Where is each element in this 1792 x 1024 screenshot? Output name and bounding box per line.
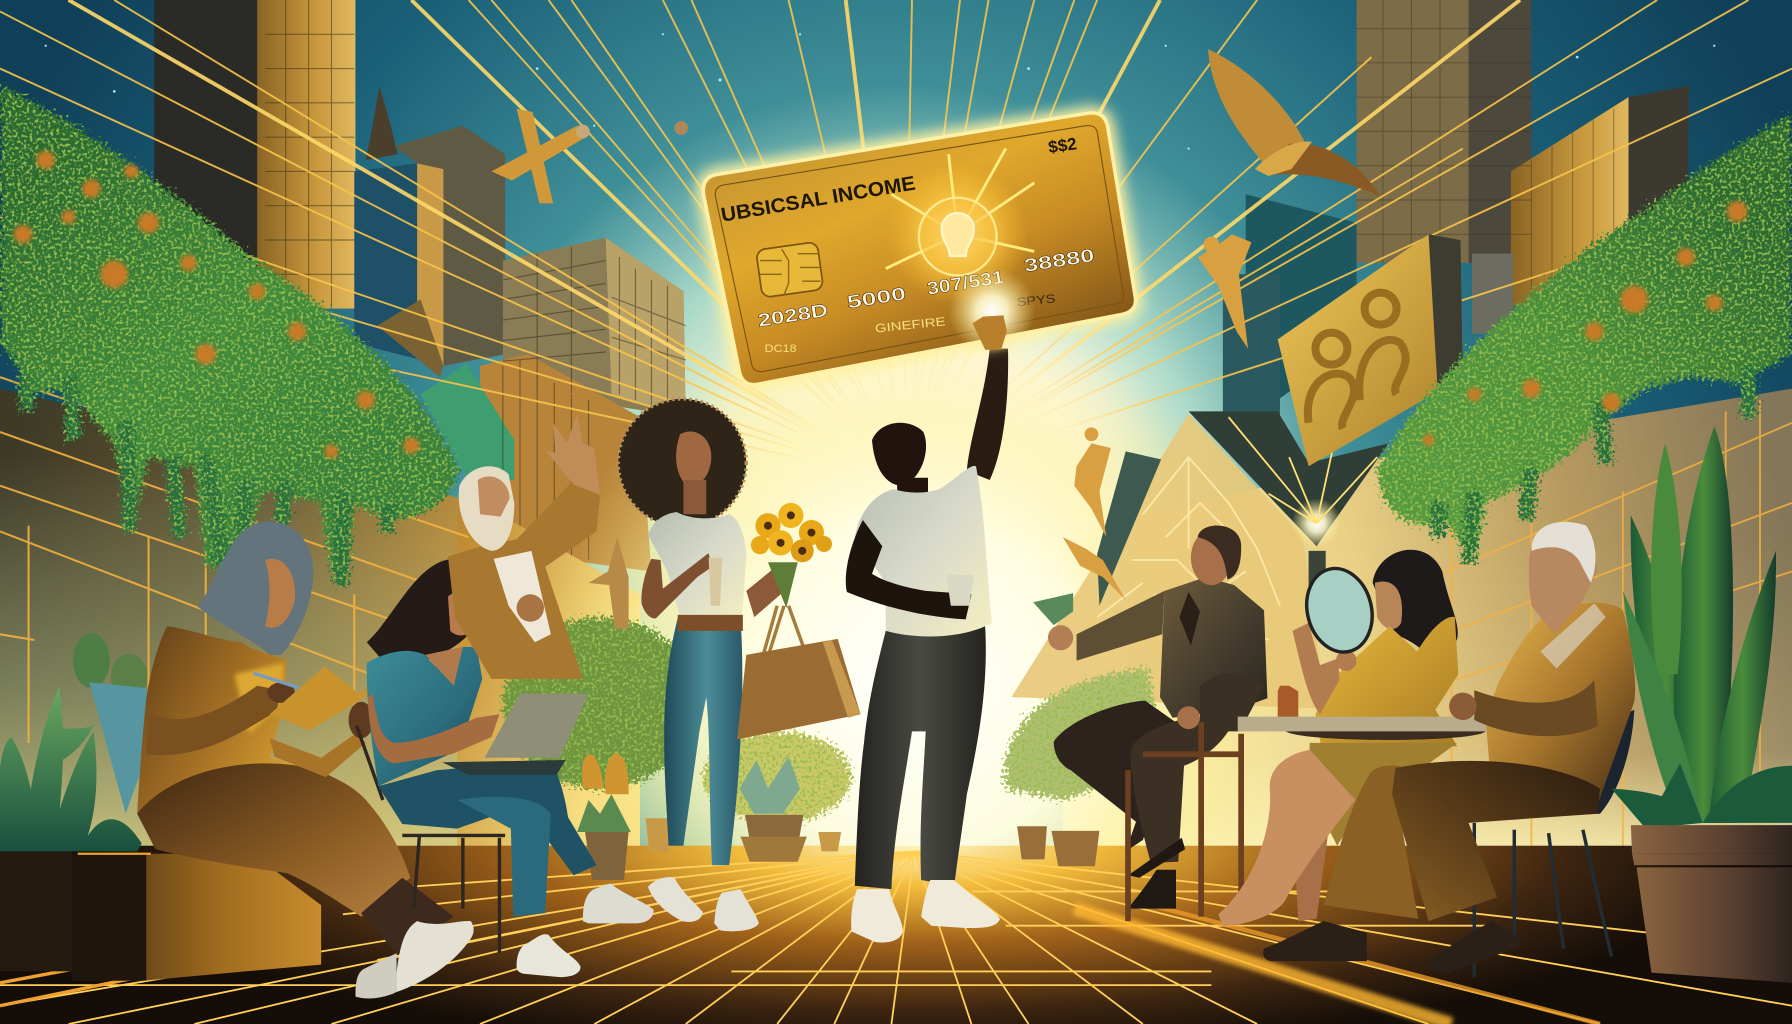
card number group 2: 5000 <box>845 282 907 313</box>
golden airplane <box>491 109 688 203</box>
card label: GINEFIRE: GINEFIRE <box>874 314 946 336</box>
house with lattice <box>1011 411 1389 709</box>
buildings: left skyline <box>154 0 686 571</box>
right wall with grid <box>1063 389 1792 869</box>
golden light rays <box>0 0 1792 480</box>
left wall with grid <box>0 377 640 869</box>
right foliage with orange blossoms <box>1377 114 1792 566</box>
card amount: $$2 <box>1047 133 1078 157</box>
gold sign with linked figures <box>1278 234 1463 466</box>
coffee cup on table <box>1278 686 1298 718</box>
teal chair back <box>89 682 149 814</box>
bar stool <box>1128 722 1241 921</box>
person: central man raising fist <box>846 349 1008 943</box>
central radiant glow <box>526 297 1303 1024</box>
person: old man with beard <box>448 414 600 679</box>
card label: SPYS: SPYS <box>1016 291 1056 309</box>
sparkle at the fist <box>949 267 1035 354</box>
seat block <box>72 854 321 981</box>
glowing golden card <box>703 113 1135 385</box>
round table <box>1238 717 1495 740</box>
sunflower bouquet <box>751 503 832 608</box>
person: woman with mirror <box>1218 550 1458 926</box>
floor <box>0 846 1792 1024</box>
left foliage with orange blossoms <box>0 86 459 585</box>
card title: UBSICSAL INCOME <box>719 173 917 227</box>
left cactus and leafy plant <box>0 633 147 971</box>
sparkle star on the roof <box>1229 417 1377 549</box>
chair of woman with laptop <box>357 726 505 953</box>
card label: DC18: DC18 <box>765 343 797 355</box>
raised fist <box>973 315 1007 350</box>
card lightbulb emblem <box>886 149 1034 305</box>
background potted plants <box>577 754 1099 880</box>
person: older man writing <box>1263 522 1635 977</box>
card number group 4: 38880 <box>1022 244 1096 276</box>
card number group 1: 2028D <box>756 299 829 331</box>
person: woman with laptop <box>367 559 654 977</box>
floor light lines <box>0 851 1792 1024</box>
card number group 3: 307/531 <box>925 266 1005 299</box>
buildings: right skyline <box>1223 0 1689 434</box>
person: man in suit with banknotes <box>1033 525 1267 909</box>
person: woman with notebook <box>137 521 474 998</box>
stars <box>45 33 1715 150</box>
golden bird <box>1208 49 1381 197</box>
brown shoulder bag <box>737 606 861 739</box>
bright beam below the card <box>749 320 1126 594</box>
card chip <box>756 242 824 298</box>
person: woman with afro <box>618 399 794 931</box>
snake plant and large pot <box>1611 426 1792 983</box>
background bushes <box>503 617 1154 823</box>
flying figures <box>589 234 1251 629</box>
